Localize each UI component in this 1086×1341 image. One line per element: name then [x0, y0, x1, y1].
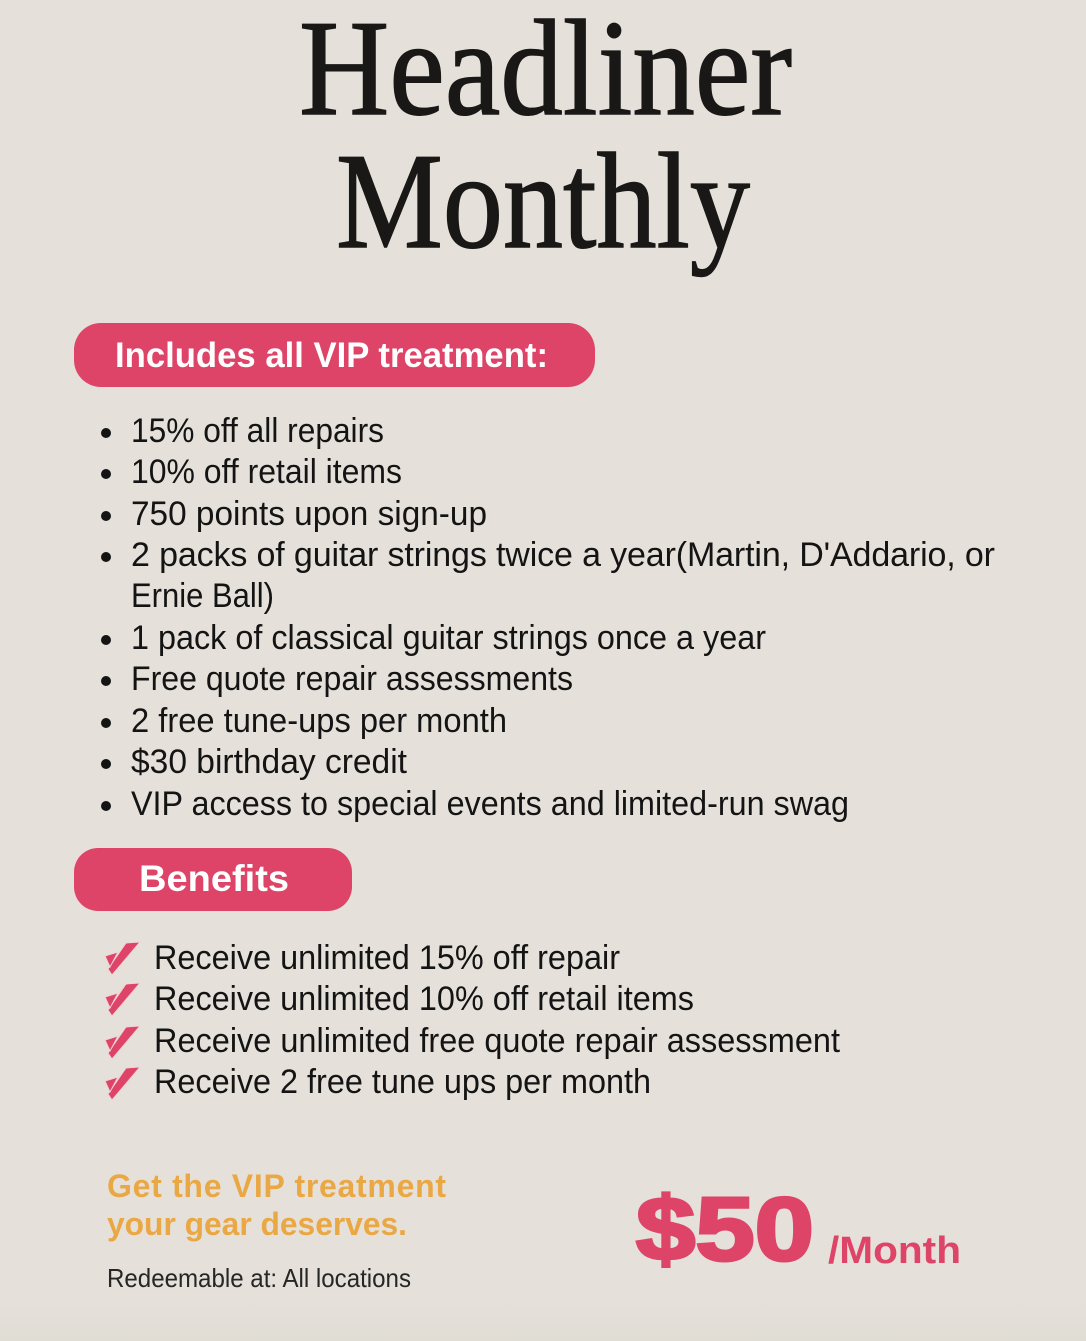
icon: check mark [105, 942, 140, 975]
list: VIP treatment items [101, 412, 995, 823]
icon: check mark [105, 1067, 140, 1100]
price: $50 [636, 1180, 814, 1280]
title: Monthly [336, 125, 750, 277]
tagline: Get the VIP treatment [107, 1168, 446, 1204]
list: VIP treatment items: 2 free tune-ups per month [131, 702, 507, 740]
price: /Month [828, 1230, 961, 1272]
heading pill: benefits: Benefits [139, 858, 289, 899]
list: benefits with check marks: Receive unlimited free quote repair assessment [154, 1022, 841, 1060]
list: VIP treatment items: 2 packs of guitar strings twice a year(Martin, D'Addario, or [131, 536, 995, 574]
heading pill: includes all VIP treatment [74, 323, 595, 387]
icon: check mark [105, 983, 140, 1016]
list: benefits with check marks: Receive unlimited 10% off retail items [154, 980, 694, 1018]
heading pill: includes all VIP treatment: Includes all VIP treatment: [115, 336, 548, 375]
list: VIP treatment items: $30 birthday credit [131, 743, 408, 781]
list: VIP treatment items: VIP access to special events and limited-run swag [131, 785, 849, 823]
title [299, 0, 792, 277]
list: VIP treatment items: 1 pack of classical guitar strings once a year [131, 619, 766, 657]
icon: check mark [105, 1026, 140, 1059]
list: VIP treatment items: 15% off all repairs [131, 412, 384, 450]
list: VIP treatment items: Ernie Ball) [131, 577, 274, 615]
price [636, 1180, 961, 1280]
list: VIP treatment items: Free quote repair assessments [131, 660, 573, 698]
list: benefits with check marks: Receive 2 free tune ups per month [154, 1063, 651, 1101]
heading pill: benefits [74, 848, 352, 911]
list: VIP treatment items: 10% off retail items [131, 453, 402, 491]
tagline: your gear deserves. [107, 1206, 407, 1242]
list: benefits with check marks: Receive unlimited 15% off repair [154, 939, 620, 977]
list: VIP treatment items: 750 points upon sign-up [131, 495, 487, 533]
tagline [107, 1168, 446, 1242]
list: benefits with check marks [105, 939, 841, 1101]
redeemable note: Redeemable at: All locations [107, 1263, 411, 1293]
